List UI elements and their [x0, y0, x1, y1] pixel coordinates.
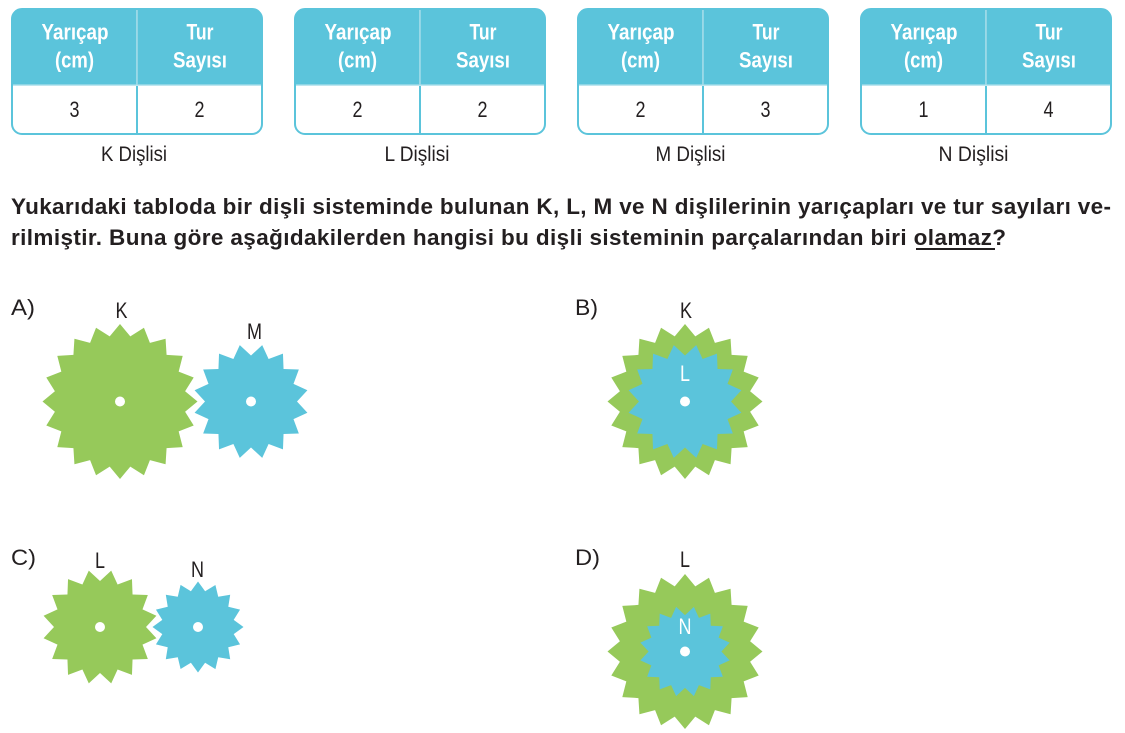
caption: M: M Dişlisi: [656, 142, 726, 166]
caption: K: K Dişlisi: [101, 142, 167, 166]
option label D: D): [575, 545, 600, 570]
header text: Yarıçap: [42, 20, 108, 44]
gear M: [195, 345, 307, 458]
option D: [575, 545, 762, 729]
table: N gear: Sayısı: [1022, 48, 1076, 72]
gears K and L nested: [608, 324, 762, 479]
option B: [575, 295, 762, 479]
table: N gear: [861, 9, 1111, 134]
table: M gear: Yarıçap: [608, 20, 674, 44]
table: M gear: 3: [760, 97, 770, 122]
option label C: C): [11, 545, 36, 570]
gear K: [43, 324, 198, 479]
table: M gear: Sayısı: [739, 48, 793, 72]
table: K gear: Tur: [186, 20, 214, 44]
table: M gear: (cm): [621, 48, 660, 72]
table: K gear: (cm): [55, 48, 94, 72]
table: L gear: [295, 9, 545, 134]
gears L and N nested: [608, 574, 762, 729]
label K: K: [116, 298, 128, 323]
table: L gear: 2: [352, 97, 362, 122]
table: L gear: 2: [478, 97, 488, 122]
question text: Yukarıdaki tabloda bir dişli sisteminde bulunan K, L, M ve N dişlilerinin yarıçapları ve tur sayıları ve-: [11, 194, 1111, 219]
label L: L: [680, 361, 690, 386]
values: 3: [70, 97, 80, 122]
table: K gear: 2: [194, 97, 204, 122]
table: M gear: Tur: [752, 20, 780, 44]
label M: M: [247, 319, 262, 344]
label N: N: [678, 614, 692, 639]
caption: L: L Dişlisi: [384, 142, 450, 166]
table: K gear: Sayısı: [173, 48, 227, 72]
table: L gear: Tur: [470, 20, 497, 44]
header cells: [12, 9, 262, 85]
table: N gear: 1: [918, 97, 928, 122]
table: L gear: Sayısı: [456, 48, 510, 72]
caption: N: N Dişlisi: [938, 142, 1008, 166]
label L: L: [680, 547, 690, 572]
option C: [11, 545, 250, 683]
table: N gear: (cm): [904, 48, 943, 72]
option label A: A): [11, 295, 35, 320]
label K: K: [680, 298, 692, 323]
table: N gear: 4: [1044, 97, 1054, 122]
table: N gear: Tur: [1036, 20, 1063, 44]
question text: [11, 194, 1111, 250]
table: K gear: [12, 9, 262, 134]
question text: rilmiştir. Buna göre aşağıdakilerden hangisi bu dişli sisteminin parçalarından biri olamaz?: [11, 225, 1006, 250]
gear L: [44, 571, 156, 683]
label L: L: [95, 548, 105, 573]
option label B: B): [575, 295, 598, 320]
gear N: [146, 575, 250, 679]
table: L gear: Yarıçap: [324, 20, 392, 44]
table: M gear: [578, 9, 828, 134]
table: M gear: 2: [636, 97, 646, 122]
table: L gear: (cm): [338, 48, 377, 72]
table: N gear: Yarıçap: [890, 20, 958, 44]
option A: [11, 295, 307, 479]
label N: N: [191, 557, 204, 582]
